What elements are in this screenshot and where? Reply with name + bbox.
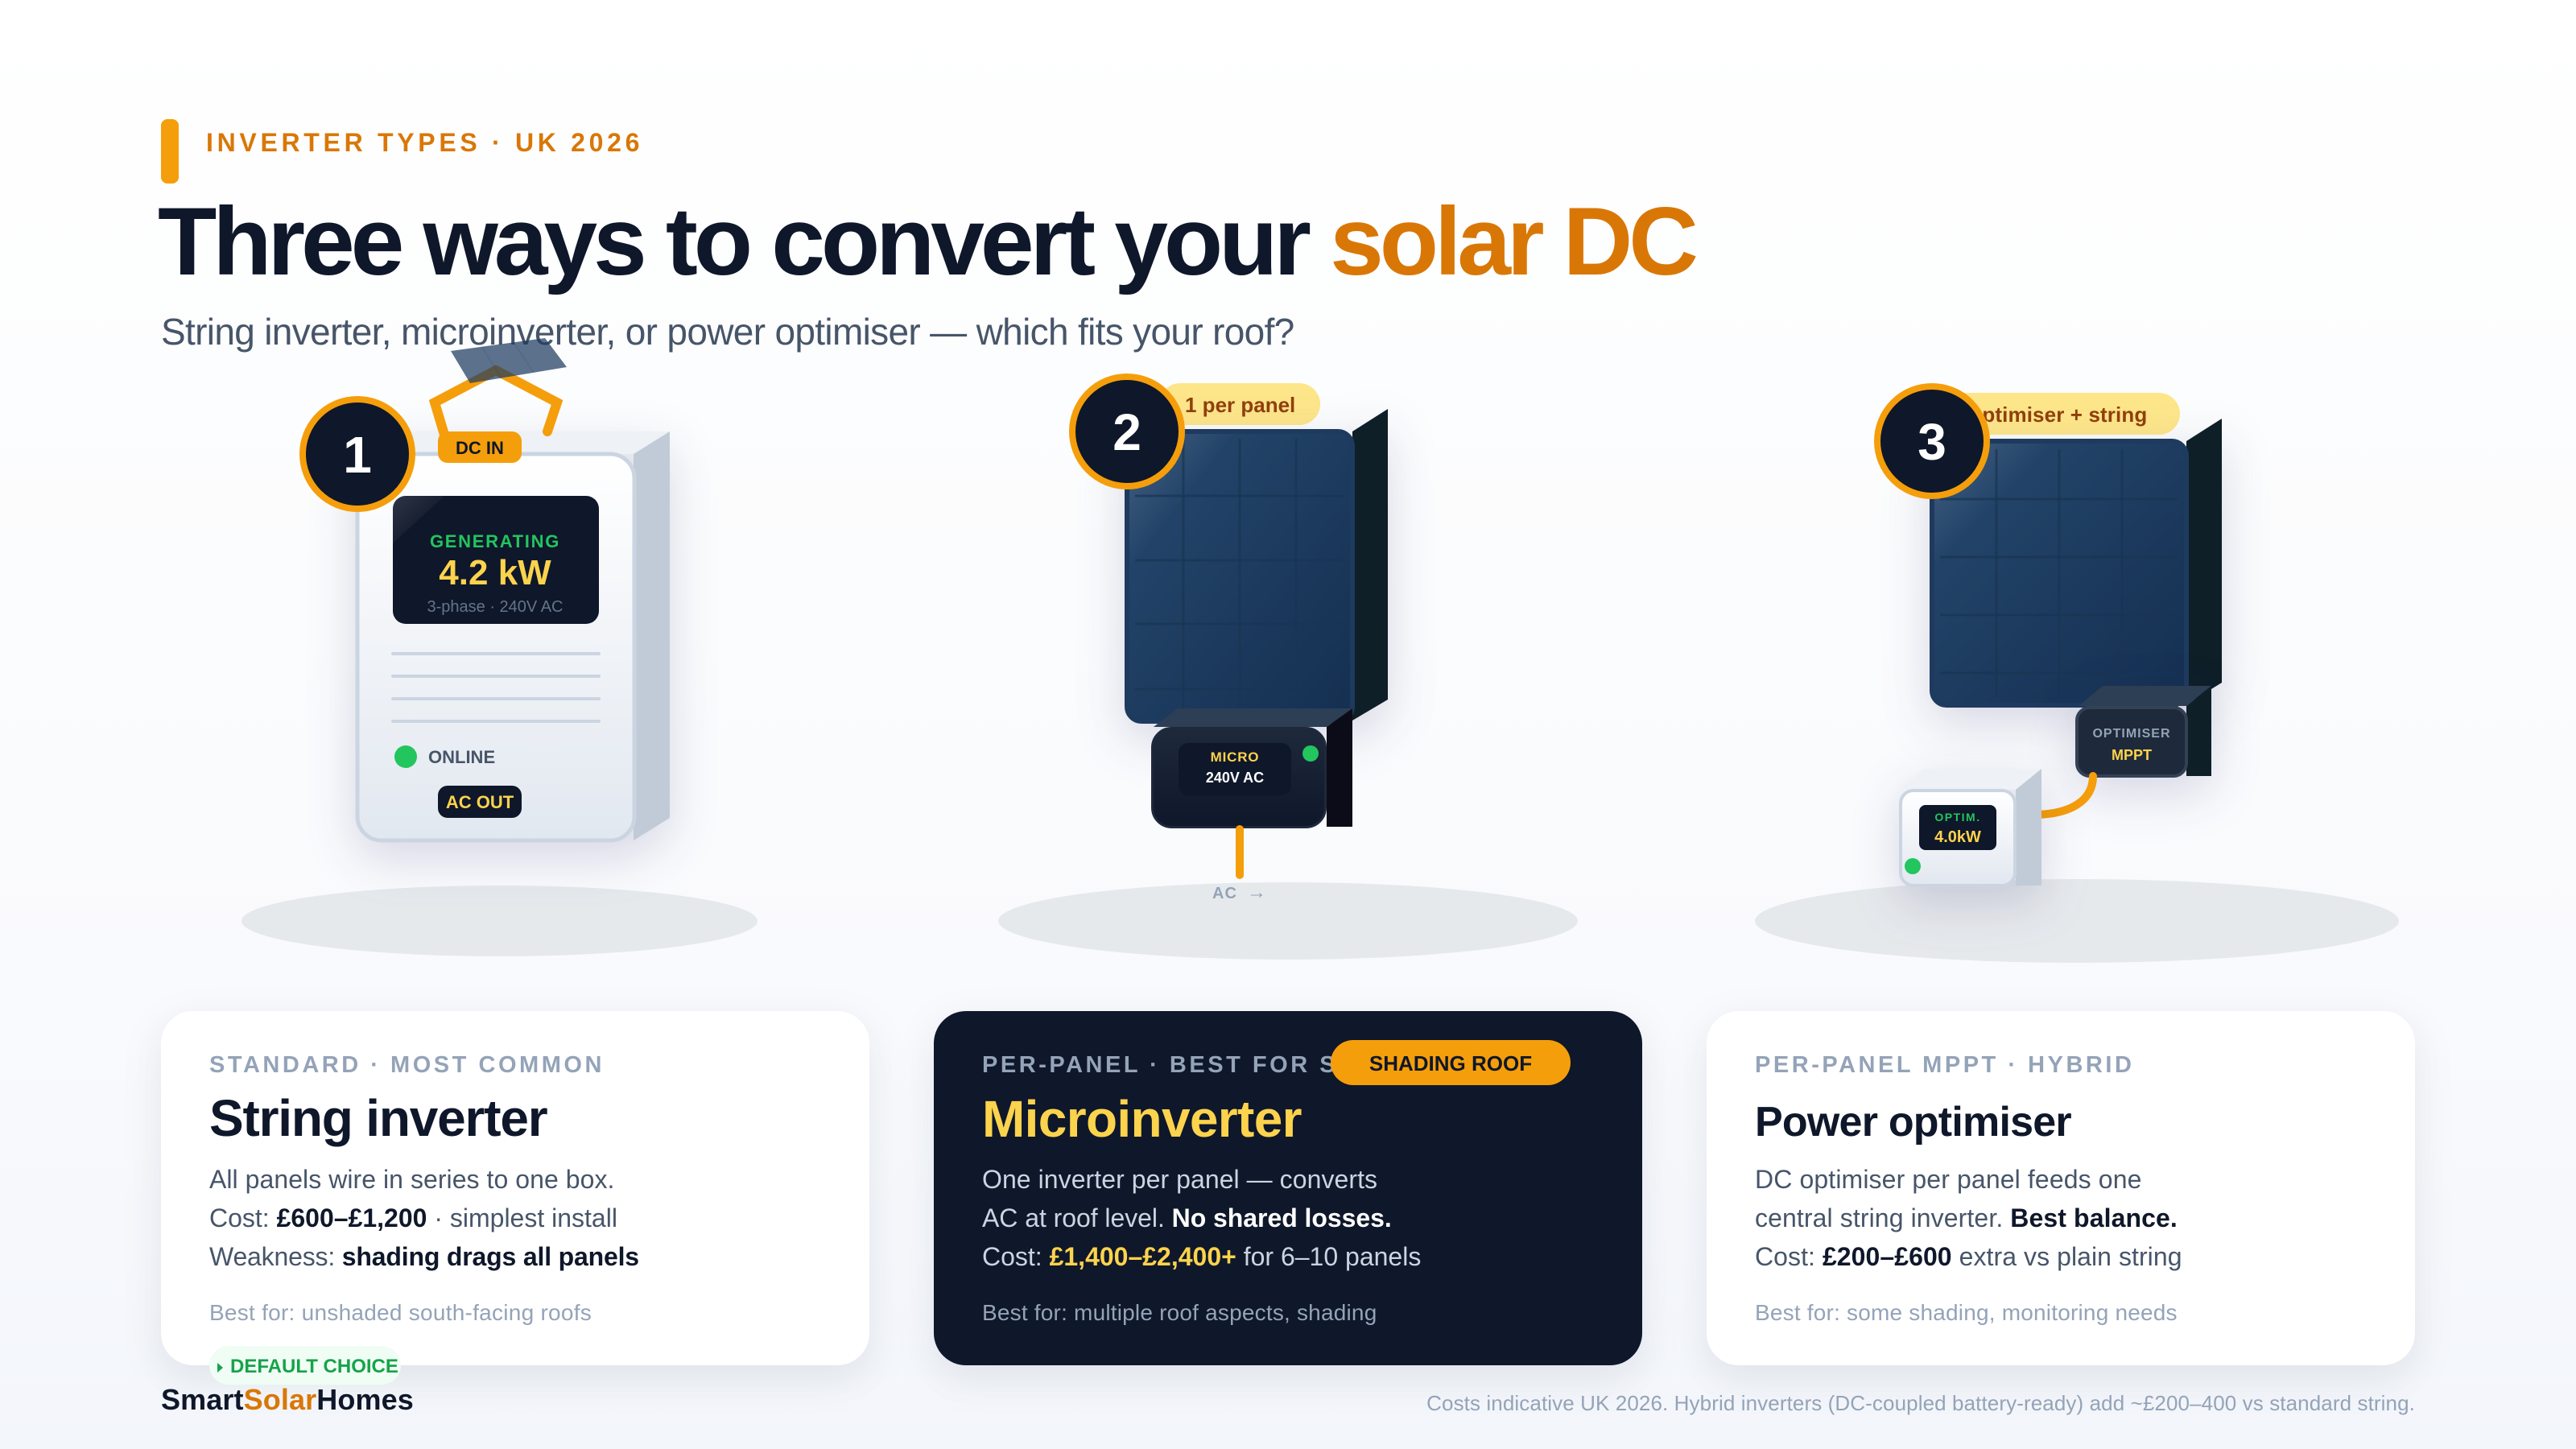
AC OUT tag: AC OUT — [446, 792, 514, 812]
tag: optimiser + string: Optimiser + string — [1966, 402, 2147, 427]
ground shadow 2 — [998, 882, 1578, 960]
microinverter unit: 240V AC — [1206, 770, 1264, 786]
default choice pill — [209, 1346, 401, 1385]
DC cable — [2037, 776, 2093, 815]
ground shadow 1 — [242, 886, 758, 956]
card body: Weakness: shading drags all panels — [209, 1242, 639, 1271]
vent lines — [391, 652, 601, 723]
card body: Cost: £200–£600 extra vs plain string — [1755, 1242, 2182, 1271]
card best-for: Best for: some shading, monitoring needs — [1755, 1300, 2178, 1325]
solar panel — [1932, 419, 2222, 705]
card body: central string inverter. Best balance. — [1755, 1203, 2178, 1232]
card body: All panels wire in series to one box. — [209, 1165, 614, 1194]
eyebrow: INVERTER TYPES · UK 2026 — [206, 128, 643, 157]
number badge 1: 1 — [343, 426, 372, 484]
brand: SmartSolarHomes — [161, 1383, 414, 1416]
card body: Cost: £600–£1,200 · simplest install — [209, 1203, 617, 1232]
number badge 1 — [303, 399, 412, 509]
screen: GENERATING — [430, 531, 560, 551]
optimiser unit — [2077, 686, 2211, 776]
card best-for: Best for: multiple roof aspects, shading — [982, 1300, 1377, 1325]
solar panel — [1127, 409, 1388, 721]
header — [158, 119, 1696, 353]
ground shadow 3 — [1755, 879, 2399, 963]
panel: power optimiser card — [1707, 1011, 2415, 1365]
illustration 1: string inverter — [303, 338, 670, 840]
screen: 3-phase · 240V AC — [427, 598, 564, 616]
card body: Cost: £1,400–£2,400+ for 6–10 panels — [982, 1242, 1421, 1271]
central inverter: OPTIM. — [1934, 811, 1981, 824]
central inverter: 4.0kW — [1934, 828, 1981, 846]
card body: AC at roof level. No shared losses. — [982, 1203, 1392, 1232]
DC IN tag: DC IN — [456, 438, 504, 458]
icon: mini solar panel — [451, 338, 567, 383]
card heading: Microinverter — [982, 1090, 1302, 1148]
subtitle: String inverter, microinverter, or power optimiser — which fits your roof? — [161, 311, 1294, 353]
card best-for: Best for: unshaded south-facing roofs — [209, 1300, 592, 1325]
card body: One inverter per panel — converts — [982, 1165, 1377, 1194]
illustration 2: microinverter — [1072, 377, 1388, 903]
card label: PER-PANEL · BEST FOR SHADING — [982, 1052, 1447, 1078]
inverter body — [356, 431, 670, 840]
panel: microinverter card — [934, 1011, 1642, 1365]
card body — [209, 1165, 639, 1271]
shading roof pill: SHADING ROOF — [1369, 1051, 1532, 1075]
icon: DC wire — [435, 370, 557, 435]
microinverter unit — [1153, 708, 1352, 828]
AC arrow label: AC — [1212, 885, 1237, 902]
optimiser unit: OPTIMISER — [2092, 727, 2171, 741]
shading roof pill — [1331, 1040, 1571, 1085]
card body — [982, 1165, 1421, 1271]
status online — [394, 745, 495, 768]
card heading: String inverter — [209, 1089, 547, 1147]
card body: DC optimiser per panel feeds one — [1755, 1165, 2142, 1194]
AC OUT tag — [438, 786, 522, 818]
number badge 2 — [1072, 377, 1182, 486]
tag: 1 per panel: 1 per panel — [1185, 393, 1295, 417]
number badge 3 — [1877, 386, 1987, 496]
accent bar — [161, 119, 179, 184]
footnote: Costs indicative UK 2026. Hybrid inverters (DC-coupled battery-ready) add ~£200–400 vs standard string. — [1426, 1391, 2415, 1415]
card body — [1755, 1165, 2182, 1271]
AC arrow label: → — [1247, 881, 1266, 903]
panel: string inverter card — [161, 1011, 869, 1385]
optimiser unit: MPPT — [2112, 747, 2152, 763]
tag: optimiser + string — [1932, 393, 2180, 435]
card label: PER-PANEL MPPT · HYBRID — [1755, 1052, 2134, 1078]
microinverter unit: MICRO — [1211, 749, 1259, 765]
DC IN tag — [438, 431, 522, 463]
central inverter — [1899, 769, 2041, 886]
number badge 2: 2 — [1113, 403, 1141, 461]
title: Three ways to convert your solar DC — [158, 188, 1696, 295]
card heading: Power optimiser — [1755, 1099, 2071, 1146]
illustration 3: power optimiser — [1877, 386, 2222, 886]
screen — [393, 496, 599, 624]
default choice pill: DEFAULT CHOICE — [230, 1356, 398, 1377]
AC wire — [1236, 829, 1244, 875]
screen: 4.2 kW — [439, 553, 551, 592]
tag: 1 per panel — [1159, 383, 1320, 425]
status online: ONLINE — [428, 747, 495, 767]
number badge 3: 3 — [1918, 413, 1946, 471]
card label: STANDARD · MOST COMMON — [209, 1052, 605, 1078]
